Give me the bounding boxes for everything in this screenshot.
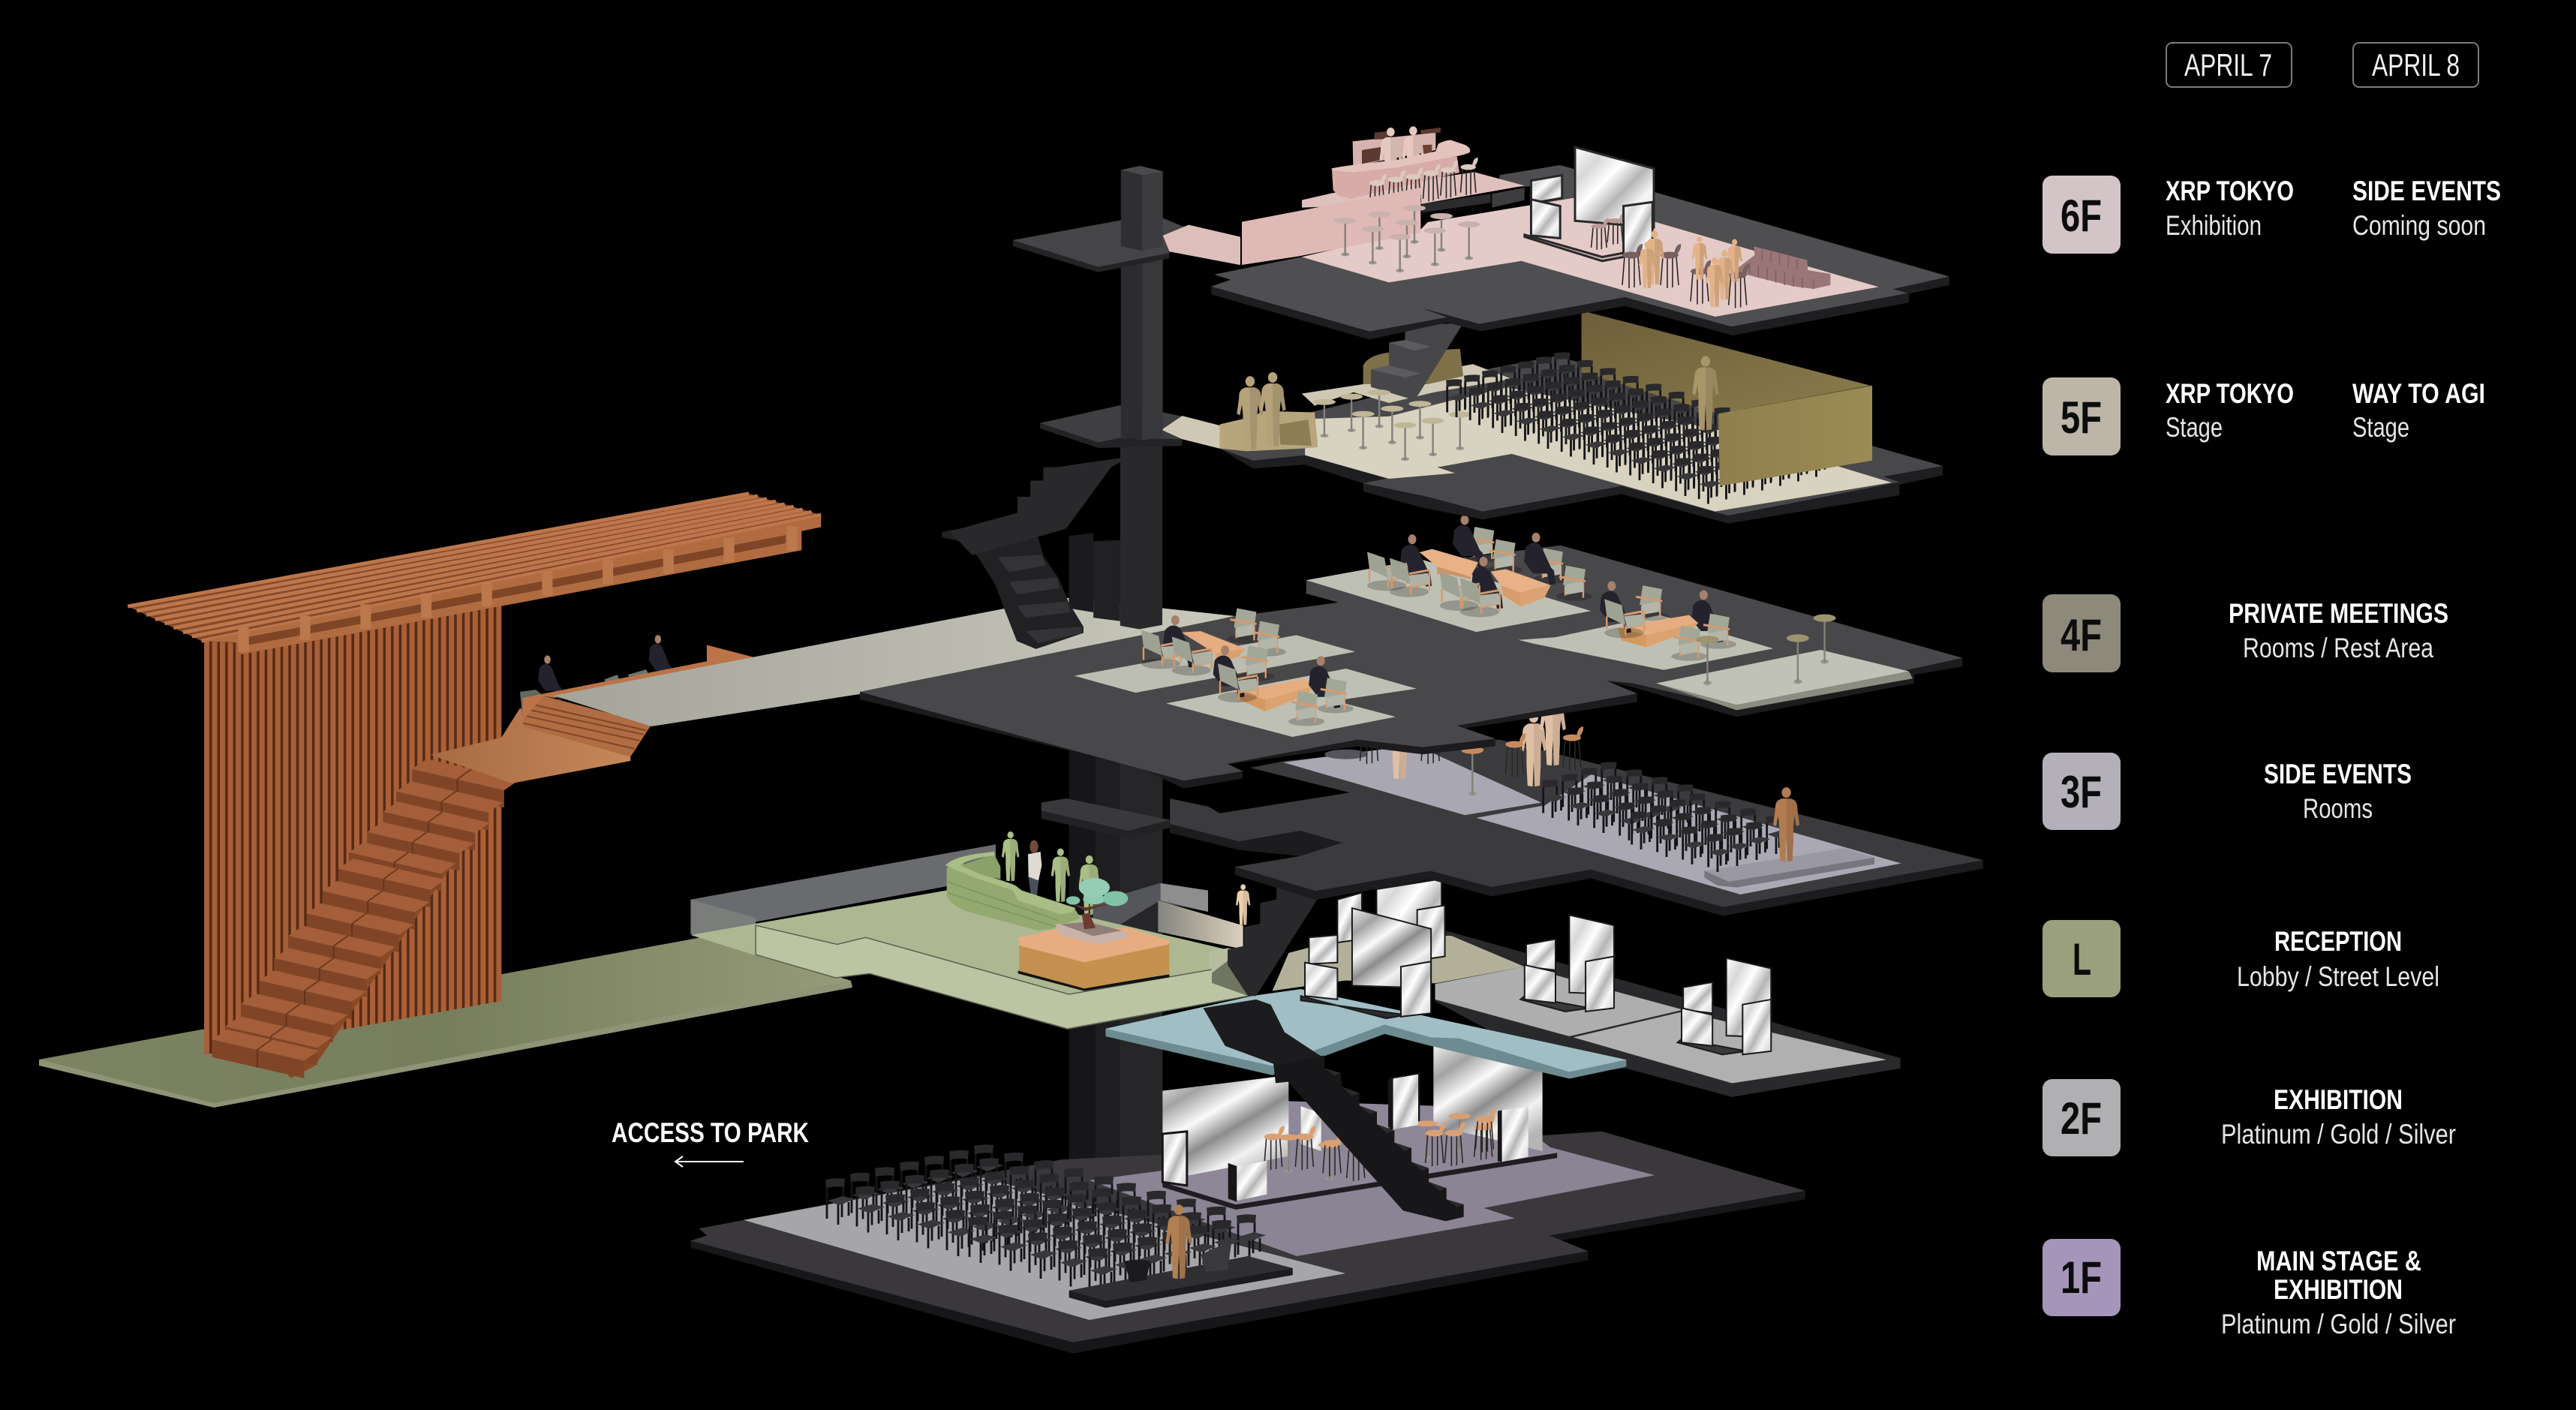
core column shaft between 5F and 6F [1121,248,1163,440]
L back glass wall [690,844,996,934]
2F dark slab [1435,929,1901,1097]
5F row: Stage [2166,412,2223,443]
timber balustrade [522,645,757,720]
6F booth screens [1525,147,1654,261]
2F booth screens set one [1301,879,1445,1018]
4F left meeting set [1141,609,1286,675]
2F row: EXHIBITION [2274,1084,2403,1115]
2F booth screens set two [1520,915,1614,1012]
5F row: WAY TO AGI [2352,378,2485,409]
6F row [2042,176,2501,254]
1F lounge furniture right [1416,1108,1496,1166]
1F row: 1F [2060,1252,2102,1303]
4F slab [860,546,1962,789]
5F slab [1219,356,1943,524]
1F row: Platinum / Gold / Silver [2221,1309,2456,1339]
1F row: EXHIBITION [2274,1274,2403,1305]
3F audience chairs [1542,762,1790,872]
date tag April 7 [2166,43,2292,87]
1F front screen left [1228,1161,1267,1202]
5F audience chairs [1446,352,1830,504]
1F stage with speaker and armchairs [1069,1204,1293,1308]
1F lounge furniture left [1264,1126,1367,1181]
3F row [2042,753,2412,830]
5F high tables [1313,389,1471,461]
6F pink partition wall [1242,188,1420,265]
5F stair from 6F [1371,323,1463,400]
park ground plane [39,936,852,1108]
1F round tables, stools and front screens [1228,1075,1528,1202]
2F grey floor right [1574,1012,1886,1083]
slatted timber wall [204,598,501,1054]
6F front screen [1624,202,1652,256]
3F row: Rooms [2303,793,2373,824]
6F row: SIDE EVENTS [2352,176,2501,206]
L floor [690,888,1256,1030]
5F row [2042,377,2485,455]
4F row: Rooms / Rest Area [2243,633,2433,663]
date tag April 8 [2353,43,2478,87]
floor 6F exhibition [1013,126,1949,339]
6F stools [1622,244,1749,308]
5F rear cream floor [1302,364,1512,406]
5F row: XRP TOKYO [2166,378,2294,409]
6F mannequins [1639,230,1742,307]
4F row [2042,594,2448,672]
legend [2042,43,2501,1339]
3F row: 3F [2060,767,2102,817]
arrow to park [675,1156,744,1167]
1F slab [690,1132,1805,1353]
5F curved niche [1363,349,1463,384]
6F row: Exhibition [2166,210,2262,241]
L frosted glass cubicle and figure [1093,883,1251,997]
4F row: 4F [2060,610,2102,660]
L row: Lobby / Street Level [2237,961,2439,992]
black stair from L to 2F [1204,885,1321,1065]
date tag April 8: APRIL 8 [2372,47,2460,83]
3F speaker [1773,787,1799,861]
4F row: PRIVATE MEETINGS [2229,598,2448,629]
L orange reception counter [1018,928,1169,991]
timber steps to the upper terrace [522,696,651,757]
black stair from 2F to 1F [1273,1056,1464,1221]
L row: RECEPTION [2274,926,2402,957]
L bonsai tree [1056,878,1128,944]
timber roof [128,494,821,654]
1F front screen right [1498,1107,1528,1162]
access to park label: ACCESS TO PARK [612,1117,809,1148]
4F right meeting set [1600,581,1736,661]
5F cream walkway [1162,416,1221,449]
date tag April 7: APRIL 7 [2184,47,2272,83]
3F slab [1170,740,1983,916]
5F speaker and gold front wall [1692,356,1872,486]
4F rear table one [1420,549,1478,579]
L reception figures [1002,831,1100,915]
4F mat right meeting room [1518,615,1773,670]
5F row: Stage [2352,412,2409,443]
3F row: SIDE EVENTS [2264,759,2412,789]
6F sofa [1739,246,1830,289]
6F core arm [1013,218,1186,272]
5F core arm [1040,405,1183,448]
4F rear meeting set [1367,516,1592,617]
2F beige floor [1273,936,1525,991]
L row [2042,920,2439,997]
L row: L [2073,934,2091,985]
L side glass [690,900,756,953]
1F front screen middle [1388,1075,1418,1129]
1F row: MAIN STAGE & [2256,1246,2421,1276]
4F mat left meeting room [1075,635,1355,693]
floor 5F stage [1040,311,1943,524]
core ribs and upper column shaft [1069,445,1162,630]
core column, lower part [1069,722,1162,1201]
L front glass balustrade [756,925,1248,1029]
6F bar stools [1369,158,1478,211]
3F floor right room [1476,774,1901,894]
timber landing [431,708,630,783]
3F core flange [1042,798,1170,838]
5F welcome desk [1219,372,1318,451]
5F main cream floor [1305,387,1892,512]
core arm and floor 3F side events [1042,691,1983,916]
floor 2F exhibition [1105,879,1901,1097]
3F floor left room [1283,745,1541,815]
lobby level L reception [690,831,1256,1030]
6F pink walkway [1163,225,1240,265]
2F row [2042,1079,2456,1156]
4F rear table two [1491,569,1551,606]
L reception desk [945,852,1081,930]
1F audience chairs [825,1144,1266,1294]
5F row: 5F [2060,392,2102,443]
core column stub above 6F [1121,166,1163,251]
4F front meeting set [1213,645,1354,726]
glazed terrace walkway [554,597,1235,726]
1F booth back screens [1162,1046,1543,1186]
6F row: XRP TOKYO [2166,176,2294,206]
4F mat front meeting room [1166,669,1417,737]
6F pink floor [1302,198,1879,317]
2F row: Platinum / Gold / Silver [2221,1119,2456,1150]
4F mat corner lounge [1656,650,1913,710]
1F exhibition floor [1090,1146,1655,1256]
1F stage floor [744,1177,1345,1320]
upper stair flight to 5F [950,456,1131,555]
6F row: Coming soon [2352,210,2486,241]
6F row: 6F [2060,191,2102,241]
2F row: 2F [2060,1093,2102,1144]
5F gold back wall [1582,311,1870,413]
3F round seat and mannequins [1324,691,1583,796]
2F grey floor left [1435,967,1683,1036]
timber stair [212,759,519,1078]
1F row [2042,1239,2456,1339]
1F booth platform [1162,1101,1557,1210]
2F booth screens set three [1678,958,1771,1054]
middle flight [1204,1000,1321,1065]
floor 1F main stage and exhibition [690,1046,1805,1353]
6F bar platform [1302,170,1531,218]
timber pavilion with slatted wall and stair [128,494,821,1078]
6F bar counter [1331,140,1470,199]
4F mat rear meeting room [1306,559,1591,632]
floor 4F private meetings [860,516,1962,789]
seated guests on the terrace [520,635,731,718]
6F high tables [1334,205,1480,272]
6F booth stools [1592,213,1625,250]
4F high tables [1697,615,1836,685]
4F black stair block [942,522,1084,649]
upper flight [1228,885,1317,996]
6F bar back shelf with staff [1353,126,1441,191]
3F stage [1704,848,1874,888]
2F blue walkway [1105,989,1626,1079]
6F slab [1211,165,1949,339]
